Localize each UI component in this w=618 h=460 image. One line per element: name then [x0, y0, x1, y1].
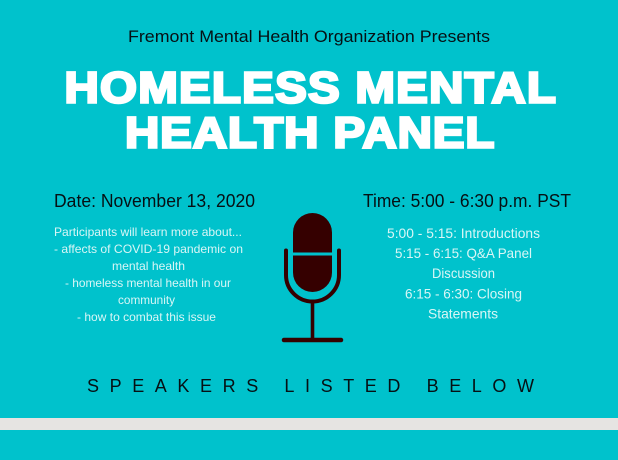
- presenter line: Fremont Mental Health Organization Presents: [128, 27, 490, 46]
- text block: what participants will learn: community: [118, 293, 175, 307]
- text block: schedule: Statements: [428, 306, 498, 322]
- text block: what participants will learn: mental health: [112, 259, 185, 273]
- date heading: Date: November 13, 2020: [54, 191, 255, 211]
- title: HOMELESS MENTAL: [64, 63, 556, 112]
- title: [64, 63, 556, 157]
- text block: what participants will learn: - affects of COVID-19 pandemic on: [54, 242, 243, 256]
- text block: schedule: Discussion: [432, 265, 495, 281]
- text block: what participants will learn: Participants will learn more about...: [54, 225, 242, 239]
- text block: what participants will learn: - how to combat this issue: [77, 310, 216, 324]
- text block: schedule: 6:15 - 6:30: Closing: [405, 286, 522, 302]
- text block: schedule: 5:15 - 6:15: Q&A Panel: [395, 245, 532, 261]
- divider band: [0, 418, 618, 430]
- icon: microphone: [284, 213, 341, 340]
- text block: schedule: [387, 225, 540, 322]
- text block: what participants will learn: - homeless mental health in our: [65, 276, 231, 290]
- time heading: Time: 5:00 - 6:30 p.m. PST: [363, 191, 571, 211]
- title: HEALTH PANEL: [125, 108, 494, 157]
- text block: schedule: 5:00 - 5:15: Introductions: [387, 225, 540, 241]
- speakers notice: SPEAKERS LISTED BELOW: [87, 376, 534, 396]
- text block: what participants will learn: [54, 225, 243, 324]
